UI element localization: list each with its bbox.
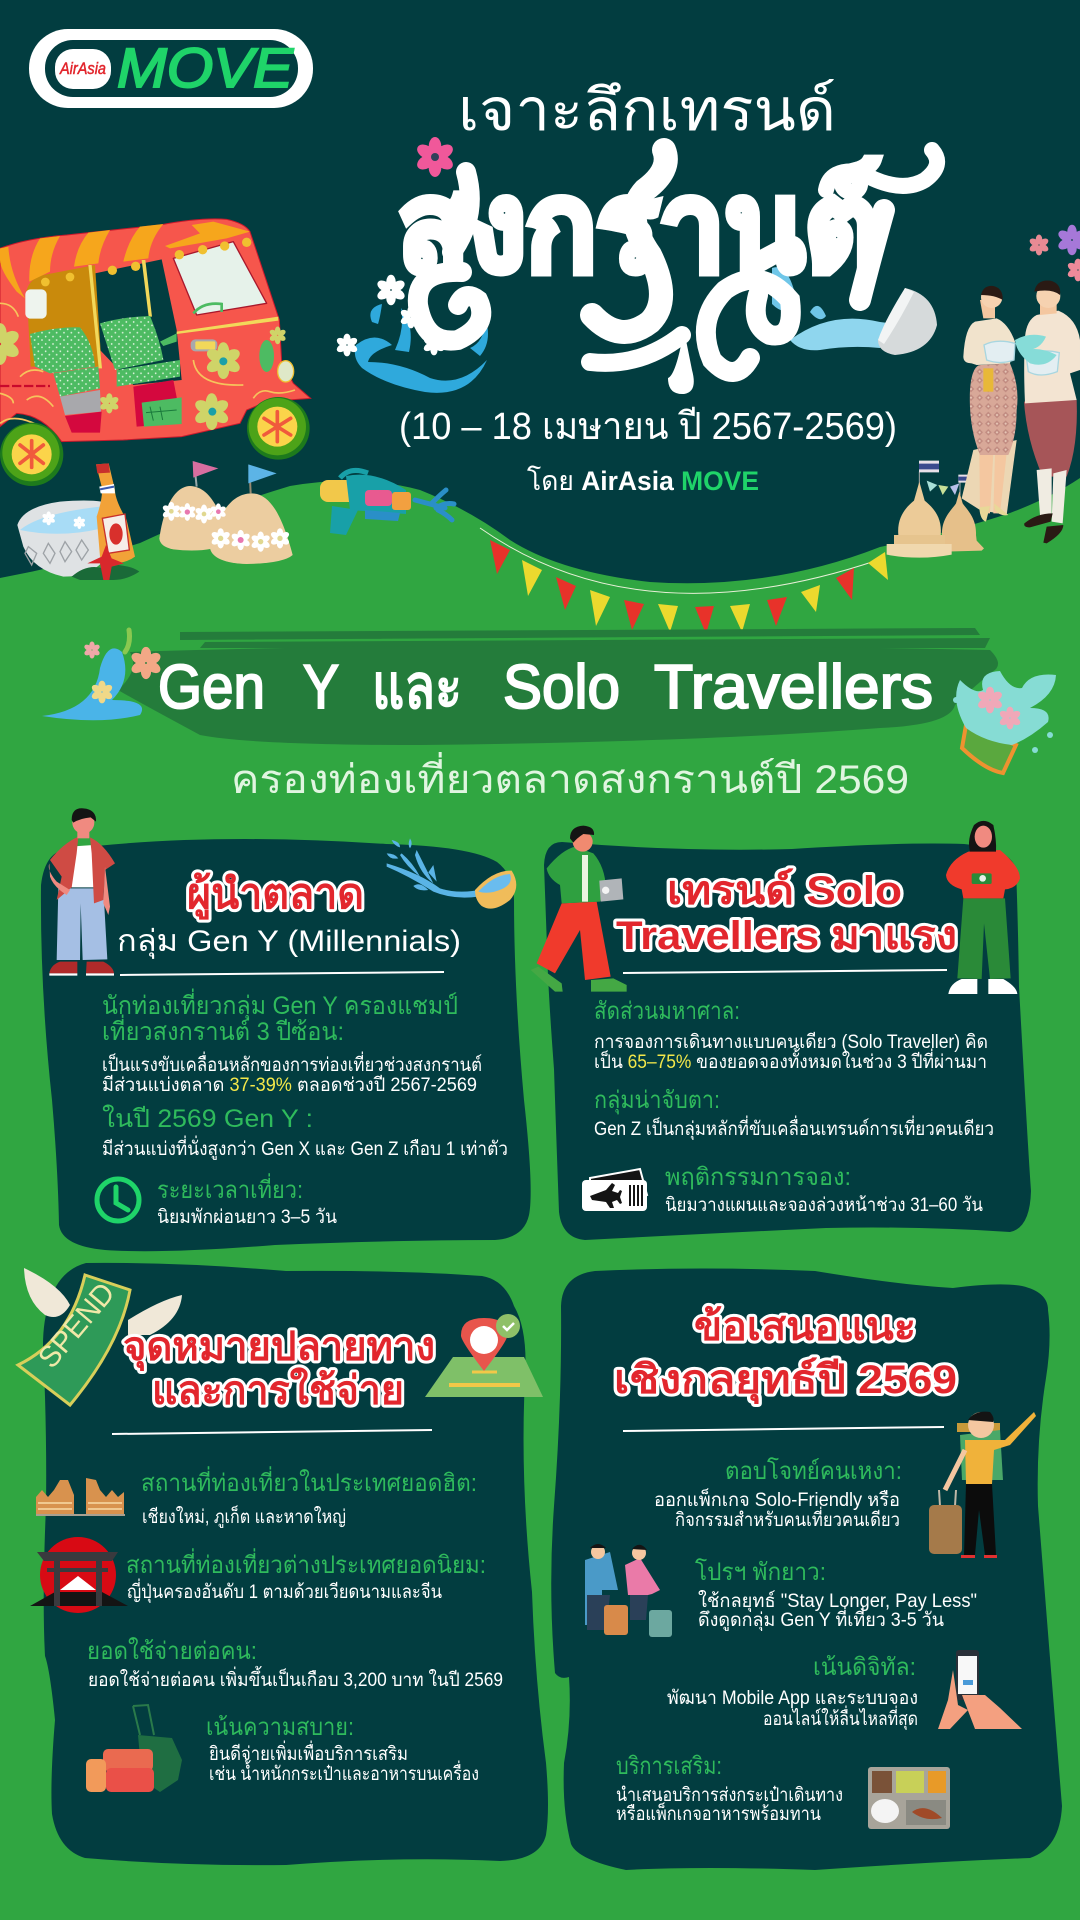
text: spend per person: ยอดใช้จ่ายต่อคน: bbox=[87, 1637, 257, 1665]
text: comfort focus: เช่น น้ำหนักกระเป๋าและอาหารบนเครื่อง bbox=[209, 1760, 479, 1785]
silver bowls with water bbox=[984, 335, 1059, 375]
illustration: woman with camera bbox=[946, 821, 1020, 994]
panel heading bbox=[616, 868, 957, 958]
panel: market leaders Gen Y bbox=[41, 808, 531, 1251]
illustration: tuk-tuk bbox=[0, 219, 311, 486]
text: group to watch: Gen Z เป็นกลุ่มหลักที่ขับเคลื่อนเทรนด์การเที่ยวคนเดียว bbox=[594, 1115, 994, 1141]
text: Gen Y champion: เป็นแรงขับเคลื่อนหลักของการท่องเที่ยวช่วงสงกรานต์ bbox=[102, 1051, 482, 1076]
decorative water drop of the lettering bbox=[668, 330, 694, 394]
heading: Gen Y and Solo Travellers: Travellers bbox=[654, 653, 933, 722]
icon: water splash with flowers left of heading bbox=[42, 630, 163, 720]
banner: dark brush stroke behind heading bbox=[118, 628, 998, 745]
text: solo share: การจองการเดินทางแบบคนเดียว (Solo Traveller) คิด bbox=[594, 1031, 988, 1053]
illustration: backpacker bbox=[929, 1412, 1036, 1558]
text: solo share bbox=[594, 998, 988, 1073]
panel heading: Travellers มาแรง bbox=[616, 914, 957, 958]
heading: Gen Y and Solo Travellers bbox=[158, 653, 933, 722]
text: digital focus: พัฒนา Mobile App และระบบจอง bbox=[667, 1688, 918, 1709]
title: Songkran lettering with water and flowers bbox=[335, 137, 937, 394]
man bbox=[1024, 281, 1080, 543]
panel subheading: กลุ่ม Gen Y (Millennials) bbox=[117, 925, 461, 960]
text: answer lonely travellers: ออกแพ็กเกจ Solo-Friendly หรือ bbox=[654, 1487, 900, 1511]
text: long stay promotion: โปรฯ พักยาว: bbox=[695, 1558, 826, 1586]
panel heading bbox=[614, 1305, 957, 1405]
logo: AirAsia MOVE: MOVE bbox=[117, 36, 294, 99]
floating flowers top right bbox=[1028, 225, 1080, 281]
panel heading: ผู้นำตลาด bbox=[187, 870, 364, 920]
text: Gen Y in 2569: ในปี 2569 Gen Y : bbox=[102, 1104, 313, 1133]
title: Songkran lettering with water and flowers: สงกรานต์ bbox=[398, 158, 880, 297]
text: digital focus: ออนไลน์ให้ลื่นไหลที่สุด bbox=[763, 1705, 918, 1731]
illustration: sand pagodas with flags bbox=[159, 461, 293, 564]
text: Gen Y in 2569: มีส่วนแบ่งที่นั่งสูงกว่า Gen X และ Gen Z เกือบ 1 เท่าตัว bbox=[102, 1135, 508, 1160]
decorative flourish strokes of the lettering bbox=[418, 150, 937, 372]
text: extra services bbox=[616, 1753, 843, 1825]
text: group to watch bbox=[594, 1087, 994, 1141]
text: domestic hits bbox=[141, 1466, 477, 1528]
background: dark upper area bbox=[0, 0, 1080, 700]
icon: bucket with water splash bbox=[953, 671, 1056, 773]
text: comfort focus: เน้นความสบาย: bbox=[206, 1714, 354, 1741]
icon: clock bbox=[97, 1179, 139, 1221]
text: Gen Y in 2569 bbox=[102, 1104, 508, 1160]
text: domestic hits: เชียงใหม่, ภูเก็ต และหาดใหญ่ bbox=[142, 1504, 346, 1528]
icon: hands holding phone bbox=[938, 1650, 1022, 1729]
icon: plane ticket bbox=[582, 1169, 647, 1211]
text: booking behaviour: นิยมวางแผนและจองล่วงหน้าช่วง 31–60 วัน bbox=[665, 1195, 983, 1216]
text: long stay promotion: ใช้กลยุทธ์ "Stay Longer, Pay Less" bbox=[698, 1590, 977, 1613]
panel heading: เชิงกลยุทธ์ปี 2569 bbox=[614, 1357, 957, 1405]
text: long stay promotion bbox=[695, 1558, 977, 1632]
text: overseas favourites: สถานที่ท่องเที่ยวต่างประเทศยอดนิยม: bbox=[126, 1548, 486, 1579]
panel heading: เทรนด์ Solo bbox=[667, 868, 902, 913]
text: solo share: สัดส่วนมหาศาล: bbox=[594, 998, 740, 1025]
text: Gen Y champion: เที่ยวสงกรานต์ 3 ปีซ้อน: bbox=[102, 1014, 344, 1046]
byline: โดย AirAsia MOVE bbox=[527, 466, 759, 496]
text: extra services: นำเสนอบริการส่งกระเป๋าเดินทาง bbox=[616, 1785, 843, 1806]
icon: Thai temple ruins bbox=[36, 1478, 125, 1516]
icon: winged banknote: SPEND bbox=[32, 1277, 122, 1374]
logo: AirAsia MOVE: AirAsia bbox=[59, 59, 106, 78]
text: comfort focus bbox=[206, 1714, 479, 1785]
woman bbox=[962, 286, 1017, 522]
text: solo share: เป็น 65–75% ของยอดจองทั้งหมดในช่วง 3 ปีที่ผ่านมา bbox=[594, 1048, 987, 1073]
text: booking behaviour bbox=[665, 1164, 983, 1216]
text: spend per person: ยอดใช้จ่ายต่อคน เพิ่มขึ้นเป็นเกือบ 3,200 บาท ในปี 2569 bbox=[88, 1666, 503, 1691]
icon: water swoosh left bbox=[355, 304, 488, 393]
text: Gen Y champion: นักท่องเที่ยวกลุ่ม Gen Y ครองแชมป์ bbox=[102, 988, 458, 1021]
text: spend per person bbox=[87, 1637, 503, 1691]
panel heading: จุดหมายปลายทาง bbox=[123, 1325, 435, 1372]
panel: strategic recommendations bbox=[551, 1268, 1062, 1870]
illustration: silver bowl with bottle and flower bbox=[17, 463, 139, 580]
text: digital focus: เน้นดิจิทัล: bbox=[813, 1654, 916, 1681]
icon: pink flower bbox=[415, 137, 455, 177]
background: green hill and field bbox=[0, 478, 1080, 1920]
text: trip length: นิยมพักผ่อนยาว 3–5 วัน bbox=[157, 1207, 337, 1228]
icon: luggage bbox=[86, 1705, 182, 1792]
text: long stay promotion: ดึงดูดกลุ่ม Gen Y ที่เที่ยว 3-5 วัน bbox=[698, 1606, 944, 1632]
illustration: bowl splashing water bbox=[387, 838, 516, 909]
text: trip length: ระยะเวลาเที่ยว: bbox=[157, 1173, 303, 1204]
subheading: ครองท่องเที่ยวตลาดสงกรานต์ปี 2569 bbox=[231, 752, 909, 802]
text: booking behaviour: พฤติกรรมการจอง: bbox=[665, 1164, 851, 1191]
text: overseas favourites bbox=[126, 1548, 486, 1604]
text: answer lonely travellers: กิจกรรมสำหรับคนเที่ยวคนเดียว bbox=[675, 1506, 900, 1531]
date line: (10 – 18 เมษายน ปี 2567-2569) bbox=[399, 406, 897, 448]
text: extra services: บริการเสริม: bbox=[616, 1753, 722, 1780]
illustration: walking man in green jacket bbox=[531, 826, 627, 992]
title: top line: เจาะลึกเทรนด์ bbox=[458, 78, 836, 143]
text: answer lonely travellers: ตอบโจทย์คนเหงา: bbox=[725, 1457, 902, 1485]
text: answer lonely travellers bbox=[654, 1457, 902, 1531]
heading: Gen Y and Solo Travellers: Solo bbox=[503, 653, 620, 722]
icon: winged banknote bbox=[18, 1268, 182, 1405]
text: overseas favourites: ญี่ปุ่นครองอันดับ 1 ตามด้วยเวียดนามและจีน bbox=[127, 1578, 442, 1604]
icon: meal tray bbox=[868, 1767, 950, 1829]
text: comfort focus: ยินดีจ่ายเพิ่มเพื่อบริการเสริม bbox=[209, 1740, 408, 1765]
bunting flags bbox=[480, 528, 888, 634]
icon: map pin bbox=[425, 1314, 543, 1397]
illustration: man in red shirt bbox=[49, 808, 115, 976]
text: group to watch: กลุ่มน่าจับตา: bbox=[594, 1087, 720, 1115]
text: domestic hits: สถานที่ท่องเที่ยวในประเทศยอดฮิต: bbox=[141, 1466, 477, 1497]
illustration: couple in Thai dress bbox=[962, 281, 1080, 543]
heading: Gen Y and Solo Travellers: และ bbox=[372, 653, 462, 722]
text: digital focus bbox=[667, 1654, 918, 1731]
panel heading: และการใช้จ่าย bbox=[152, 1367, 404, 1413]
logo: AirAsia MOVE bbox=[29, 29, 313, 108]
icon: small white flowers bbox=[335, 275, 446, 356]
panel: solo travellers trend bbox=[531, 821, 1031, 1240]
icon: water gun bbox=[320, 470, 454, 535]
icon: torii gate and Mount Fuji bbox=[30, 1537, 128, 1613]
icon: water pouring from silver bowl bbox=[772, 267, 937, 355]
panel: destinations and spending bbox=[18, 1263, 548, 1865]
text: trip length bbox=[157, 1173, 337, 1228]
illustration: sand stupas with Thai flags bbox=[887, 461, 984, 558]
panel heading bbox=[123, 1325, 435, 1413]
illustration: couple with suitcases bbox=[585, 1544, 672, 1637]
text: Gen Y champion: มีส่วนแบ่งตลาด 37-39% ตลอดช่วงปี 2567-2569 bbox=[102, 1074, 477, 1096]
text: Gen Y champion bbox=[102, 988, 482, 1096]
heading: Gen Y and Solo Travellers: Y bbox=[303, 653, 339, 722]
panel heading: ข้อเสนอแนะ bbox=[694, 1305, 916, 1349]
text: extra services: หรือแพ็กเกจอาหารพร้อมทาน bbox=[616, 1801, 821, 1825]
heading: Gen Y and Solo Travellers: Gen bbox=[158, 653, 265, 722]
